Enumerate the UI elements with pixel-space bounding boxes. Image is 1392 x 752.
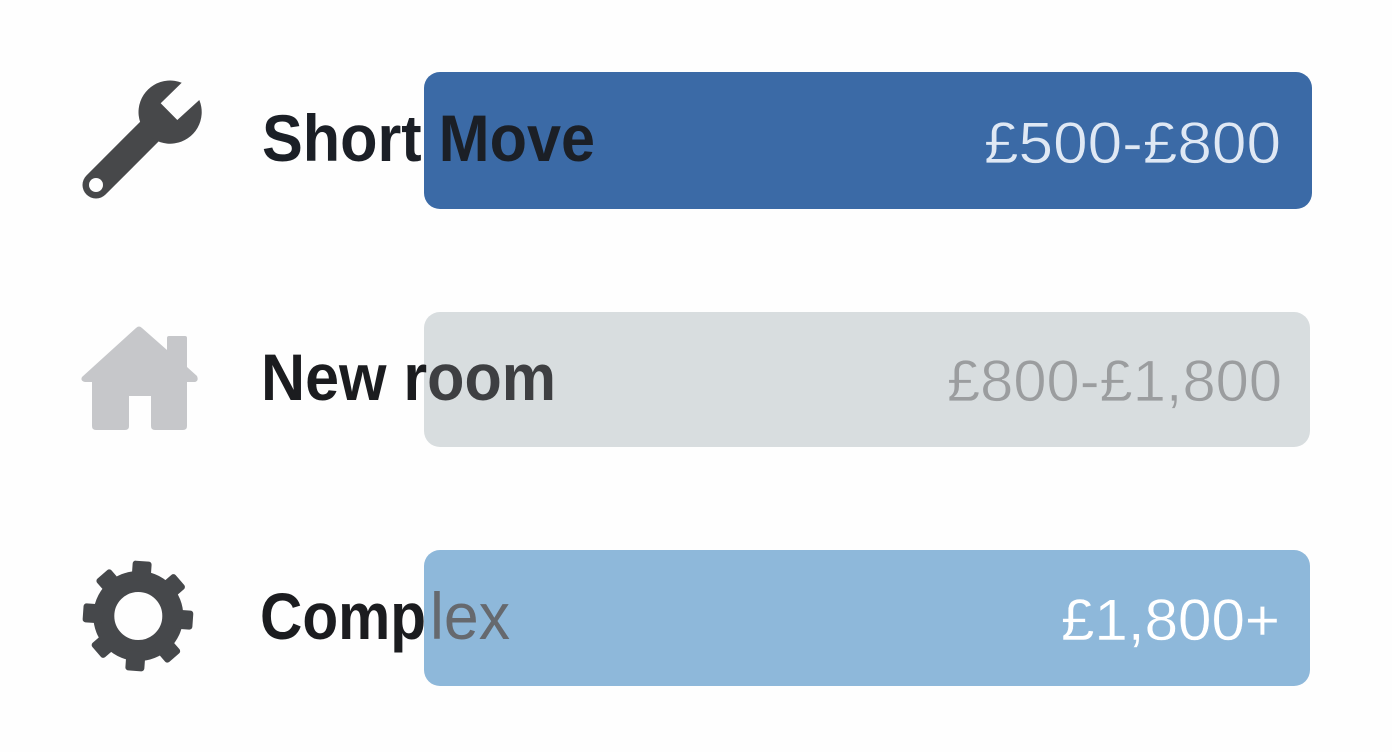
row: Short Move — [89, 72, 1312, 209]
row: New room — [81, 312, 1310, 447]
label: New room: New room — [261, 340, 556, 414]
icon: house — [81, 326, 198, 430]
icon: gear — [79, 557, 197, 675]
bar: Short Move — [424, 72, 1312, 209]
price: £1,800+: £1,800+ — [1061, 588, 1280, 653]
bar: Complex — [424, 550, 1310, 686]
row: Complex — [79, 550, 1310, 686]
label: Complex: lex — [430, 579, 510, 653]
price: £500-£800: £500-£800 — [984, 111, 1281, 176]
icon: wrench — [89, 80, 202, 192]
label: Complex: Comp — [260, 579, 426, 653]
price: £800-£1,800: £800-£1,800 — [947, 349, 1282, 414]
label: Short Move: Short Move — [262, 101, 595, 175]
bar: New room — [424, 312, 1310, 447]
